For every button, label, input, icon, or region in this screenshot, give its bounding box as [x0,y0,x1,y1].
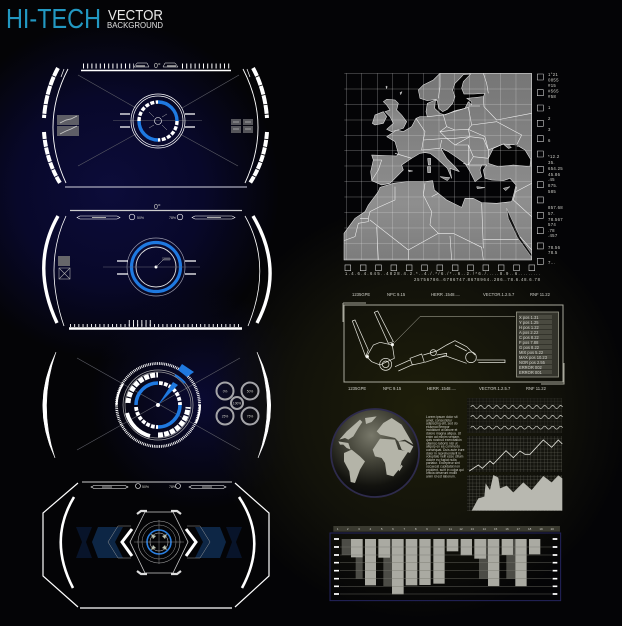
hexagon reticle [108,511,210,574]
data table: H pos 1.22 [519,325,540,330]
header labels: HERR .1548..... [431,292,460,297]
map bottom labels [345,271,541,282]
side bars [120,114,195,127]
frame [343,303,564,384]
header labels: NPC 9.15 [387,292,406,297]
data table: C pos 8.22 [519,335,540,340]
map right labels: #58 [548,94,556,99]
lorem text block: incididunt ut labore et [426,428,457,432]
gridlines [340,547,552,594]
top bar [82,482,232,489]
map right labels [548,72,563,265]
title: VECTOR [108,8,163,24]
lorem text block: ullamco laboris nisi ut [426,441,458,445]
left mini charts [57,115,79,136]
title: BACKGROUND [107,21,163,30]
map right labels: 1 [548,105,551,110]
data table: F pos 7.88 [519,340,539,345]
map right labels: 3 [548,127,551,132]
wave chart [467,398,563,433]
map bottom labels: 25756786..6786747.8678964..286..78.6.48.6.78 [414,277,541,282]
map right labels: 78.56 [548,245,561,250]
lorem text block: amet, consectetur [426,418,453,422]
left crescent [43,352,56,458]
lorem text block: dolore magna aliqua. Ut [426,432,461,436]
percent circles: 75% [247,414,253,418]
map right labels: 857.68 [548,205,563,210]
data table: NOR pos 2.55 [519,360,546,365]
line chart [467,436,562,472]
column header: 8 [415,527,417,531]
lorem text block: consequat. Duis aute irure [426,448,465,452]
map right labels: 7... [548,260,555,265]
map land [344,73,532,260]
column header: 12 [459,527,463,531]
map right labels: #15 [548,83,556,88]
data table: MIX pos 5.22 [519,350,544,355]
central gauge [103,238,200,296]
lorem text block: occaecat cupidatat non [426,464,460,468]
column header: 13 [471,527,474,531]
footer labels: RNF 11.22 [526,386,547,391]
panel: HUD 2 [44,203,270,328]
british isles [372,99,407,132]
data table: Y pos 1.25 [519,320,539,325]
right arcs [243,68,267,183]
map right labels: 35. [548,160,555,165]
lorem text block: enim ad minim veniam, [426,435,460,439]
map right labels: 875. [548,183,558,188]
column header: 16 [505,527,509,531]
bright bars [351,539,540,594]
data table [516,312,558,377]
lorem text block: quis nostrud exercitation [426,438,462,442]
column header: 17 [517,527,520,531]
red sea [507,208,532,257]
map right labels: .457 [548,233,558,238]
lorem text block [426,415,465,478]
panel: HUD 1 [44,62,267,187]
data table: MAX pos 10.23 [519,355,548,360]
column header: 15 [494,527,498,531]
lorem text block: proident, sunt in culpa qui [426,468,464,472]
column header: 20 [551,527,554,531]
islands [386,86,510,191]
percent circles [216,382,258,424]
robot arm [352,311,515,371]
column header: 6 [392,527,394,531]
dim bars [342,539,515,586]
footer labels: HERR .1548..... [427,386,456,391]
top ruler: 0° [154,62,161,70]
column header: 18 [528,527,532,531]
top bar with pills: 78% [169,216,176,220]
column header: 14 [483,527,486,531]
top bar: 78% [169,485,176,489]
southern borders [344,183,532,260]
data table: G pos 8.22 [519,345,540,350]
title: HI-TECH [6,3,101,34]
inner arcs [61,497,254,588]
lorem text block: anim id est laborum. [426,474,456,478]
map squares [345,74,543,271]
left icons [58,256,70,279]
area chart [467,475,562,511]
map right labels: 45.86 [548,172,561,177]
data table: ERROR 001 [519,370,542,375]
left arcs [44,68,68,183]
top bar: 50% [142,485,149,489]
map panel [344,73,532,260]
lorem text block: dolore eu fugiat nulla [426,458,457,462]
bar chart [330,526,561,601]
continents [338,416,413,483]
lorem text block: Lorem ipsum dolor sit [426,415,458,419]
map right labels: 574 [548,222,556,227]
percent circles: 25% [222,414,228,418]
column header: 7 [403,527,405,531]
globe [331,409,419,497]
panel: HUD 4 [43,482,269,608]
data table: ERROR 002 [519,365,542,370]
column header: 19 [539,527,543,531]
cross lines [78,75,239,166]
column header: 1 [337,527,339,531]
blue frame [330,533,561,601]
header labels: VECTOR.1.2.5.7 [483,292,515,297]
footer labels: NPC 9.15 [383,386,402,391]
data table: A pos 2.22 [519,330,539,335]
column header: O [438,527,441,531]
map right labels: 654.25 [548,166,563,171]
side ticks [334,539,557,594]
data table: X pos 1.31 [519,315,539,320]
octagon frame [43,483,269,608]
map right labels: 78.5 [548,250,558,255]
map grid [344,73,532,260]
bottom ruler [69,323,242,328]
map bottom labels: 1.4.6.4.645..4828.4.2.*..4./.*/6./*..6..2./*6./.....8.9..6......... [345,271,540,276]
map right labels: 1°21 [548,72,558,77]
map right labels: .78 [548,228,555,233]
top bar with pills [70,210,242,220]
map right labels: 57. [548,211,555,216]
lorem text block: officia deserunt mollit [426,471,457,475]
column header: 9 [426,527,428,531]
lorem text block: voluptate velit esse cillum [426,455,464,459]
top bar with pills: 50% [137,216,144,220]
header labels: 1235GPE [352,292,370,297]
column header: 11 [449,527,452,531]
bottom line [65,186,247,188]
lorem text block: eiusmod tempor [426,425,451,429]
right arcs [245,216,270,326]
percent circles: 50% [247,390,253,394]
cross lines [77,358,240,450]
seas [435,74,531,167]
column header: 5 [381,527,383,531]
column header: 4 [369,527,371,531]
column header [333,526,560,532]
map right labels: #565 [548,88,559,94]
map right labels: 0855 [548,78,559,82]
left arcs [44,216,66,326]
radial gauge [116,364,200,446]
panel: HUD 2: 0° [154,203,161,211]
map right labels: 585 [548,189,556,194]
column header: 3 [358,527,360,531]
right crescent [257,352,271,458]
northern borders [372,73,532,181]
lorem text block: aliquip ex ea commodo [426,445,460,449]
robot arm panel [343,292,564,391]
sea of azov [510,144,517,148]
map right labels: .45 [548,177,555,182]
header labels [352,292,551,297]
map right labels: 78.567 [548,217,563,222]
footer labels [348,386,547,391]
percent circles: 100% [233,402,241,406]
percent circles: 0% [223,390,227,394]
map right labels: *12.2 [548,154,560,159]
right mini tables [231,119,253,133]
central gauge [131,94,185,148]
header labels: RNF 11.22 [530,292,551,297]
panel: HUD 3 [43,352,271,458]
map right labels: 6 [548,138,551,143]
footer labels: 1235GPE [348,386,366,391]
column header: 2 [347,527,349,531]
map right labels: 2 [548,116,551,121]
lorem text block: adipiscing elit, sed do [426,422,458,426]
lorem text block: pariatur. Excepteur sint [426,461,460,465]
top ruler [81,62,231,70]
footer labels: VECTOR.1.2.5.7 [479,386,511,391]
lorem text block: dolor in reprehenderit in [426,451,461,455]
blue chevrons [76,527,242,558]
